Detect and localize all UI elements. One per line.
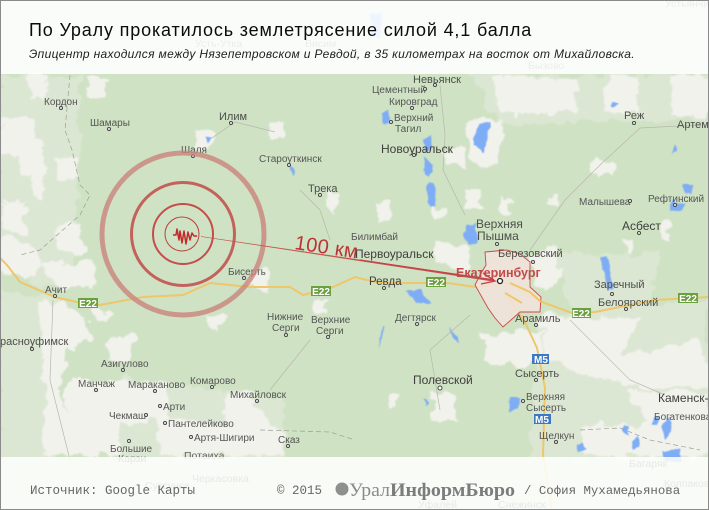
map: mottled mid-tone terrain (0, 75, 709, 460)
map: Yekaterinburg city outline (475, 250, 541, 327)
map: settlement labels: Пышма (477, 229, 519, 243)
map: highway shields (78, 277, 698, 426)
map labels faded under panels: Багаряк (629, 458, 668, 470)
map: settlement labels: Арамиль (515, 313, 561, 325)
map: minor roads and boundaries (50, 85, 700, 460)
map: highway E22 (0, 258, 709, 509)
map: light terrain patches (0, 75, 709, 456)
map: settlement labels: Невьянск (413, 74, 461, 86)
city marker: Yekaterinburg (498, 278, 502, 284)
map: highway shields: E22 (79, 299, 97, 310)
map: settlement labels: Серги (272, 323, 300, 334)
map: settlement labels: Манчаж (78, 379, 115, 390)
map: settlement labels: Реж (624, 110, 645, 122)
map: settlement labels: Рефтинский (648, 193, 704, 205)
map: settlement labels: Комарово (190, 376, 236, 387)
title: По Уралу прокатилось землетрясение силой 4,1 балла (29, 20, 532, 40)
map: settlement labels: Шаля (181, 145, 207, 156)
map: settlement labels: Белоярский (598, 297, 658, 309)
map: settlement labels: Первоуральск (355, 247, 434, 261)
map: settlement labels: Староуткинск (259, 154, 322, 165)
map: settlement labels: Кордон (44, 97, 78, 108)
map: settlement labels: Дегтярск (395, 313, 437, 324)
title panel background (1, 1, 708, 74)
map: settlement labels: Кировград (389, 97, 438, 108)
map: settlement labels: расноуфимск (0, 336, 68, 348)
map: settlement labels: Сказ (278, 435, 300, 446)
map: highway shields: M5 (535, 415, 549, 426)
map: settlement labels: Сысерть (515, 368, 559, 380)
map labels faded under panels: Суксунка (145, 480, 190, 492)
map: settlement labels: Березовский (498, 248, 563, 260)
map: highway shields: E22 (312, 287, 330, 298)
logo: UralInformBuro (336, 480, 515, 501)
map: settlement dots (30, 84, 676, 448)
map: settlement labels: Сысерть (526, 403, 566, 414)
map: settlement labels: Трека (308, 183, 338, 195)
map: settlement labels: Большие (110, 444, 153, 455)
map: settlement labels: Шамары (90, 118, 130, 129)
map: settlement labels: Заречный (594, 279, 644, 291)
map: settlement labels: Щелкун (539, 431, 574, 442)
distance line arrow (201, 236, 495, 284)
map labels faded under panels: Потаиха (184, 450, 225, 462)
map: settlement labels: Ревда (369, 276, 402, 288)
map: city roads (505, 283, 541, 303)
map: settlement labels: Малышева (579, 197, 631, 208)
map: settlement labels: Полевской (413, 373, 473, 387)
map: settlement labels: Мараканово (128, 380, 186, 391)
map: settlement labels: Серги (316, 326, 344, 337)
map: settlement labels: Билимбай (351, 231, 398, 243)
map: settlement labels: Верхний (394, 113, 433, 124)
map: settlement labels: Илим (219, 111, 247, 123)
map: settlement labels: Верхняя (476, 217, 523, 231)
map: settlement labels: Михайловск (230, 390, 287, 401)
copyright: © 2015 (277, 484, 322, 498)
map: highway shields: M5 (534, 355, 548, 366)
footer panel background (1, 457, 708, 509)
subtitle: Эпицентр находился между Нязепетровском и Ревдой, в 35 километрах на восток от Михайловска. (29, 47, 635, 61)
icon: seismogram (173, 229, 197, 244)
map labels faded under panels: Висим (305, 38, 336, 50)
map: settlement labels: Каменск- (658, 391, 708, 405)
distance label: 100 км (293, 232, 360, 263)
map: settlement labels: Бисерть (228, 267, 266, 278)
city label: Yekaterinburg: Екатеринбург (456, 266, 541, 280)
map: settlement labels: Артя-Шигири (194, 433, 254, 444)
map: highway shields: E22 (679, 294, 697, 305)
map: settlement labels: Верхняя (526, 392, 565, 403)
logo: UralInformBuro: Урал (349, 480, 391, 501)
map: highway shields: E22 (427, 278, 445, 289)
epicentre rings (102, 153, 264, 315)
map labels faded under panels: Черкасовка (192, 473, 249, 485)
map: settlement labels (0, 74, 709, 455)
source note: Источник: Google Карты (30, 484, 195, 498)
logo: UralInformBuro: ИнформБюро (390, 480, 515, 501)
map: highway shields: E22 (572, 309, 590, 320)
map: settlement labels: Цементный (372, 85, 426, 96)
map: settlement labels: Арти (163, 402, 185, 413)
author: / София Мухамедьянова (524, 484, 681, 498)
map labels faded under panels: Усть-Утка (195, 38, 242, 50)
map: settlement labels: Новоуральск (381, 142, 454, 156)
map labels faded under panels: Карзи (118, 453, 146, 465)
map: settlement labels: Верхние (311, 315, 351, 326)
map: settlement labels: Ачит (45, 285, 67, 296)
map labels faded under panels: Бызово (528, 60, 564, 72)
map: settlement labels: Чекмаш (109, 411, 146, 422)
map: lakes (205, 12, 693, 462)
map: settlement labels: Асбест (622, 219, 661, 233)
map: settlement labels: Пантелейково (168, 419, 234, 430)
map: settlement labels: Азигулово (101, 359, 149, 370)
map: settlement labels: Тагил (395, 124, 421, 135)
map: settlement labels: Нижние (267, 312, 304, 323)
